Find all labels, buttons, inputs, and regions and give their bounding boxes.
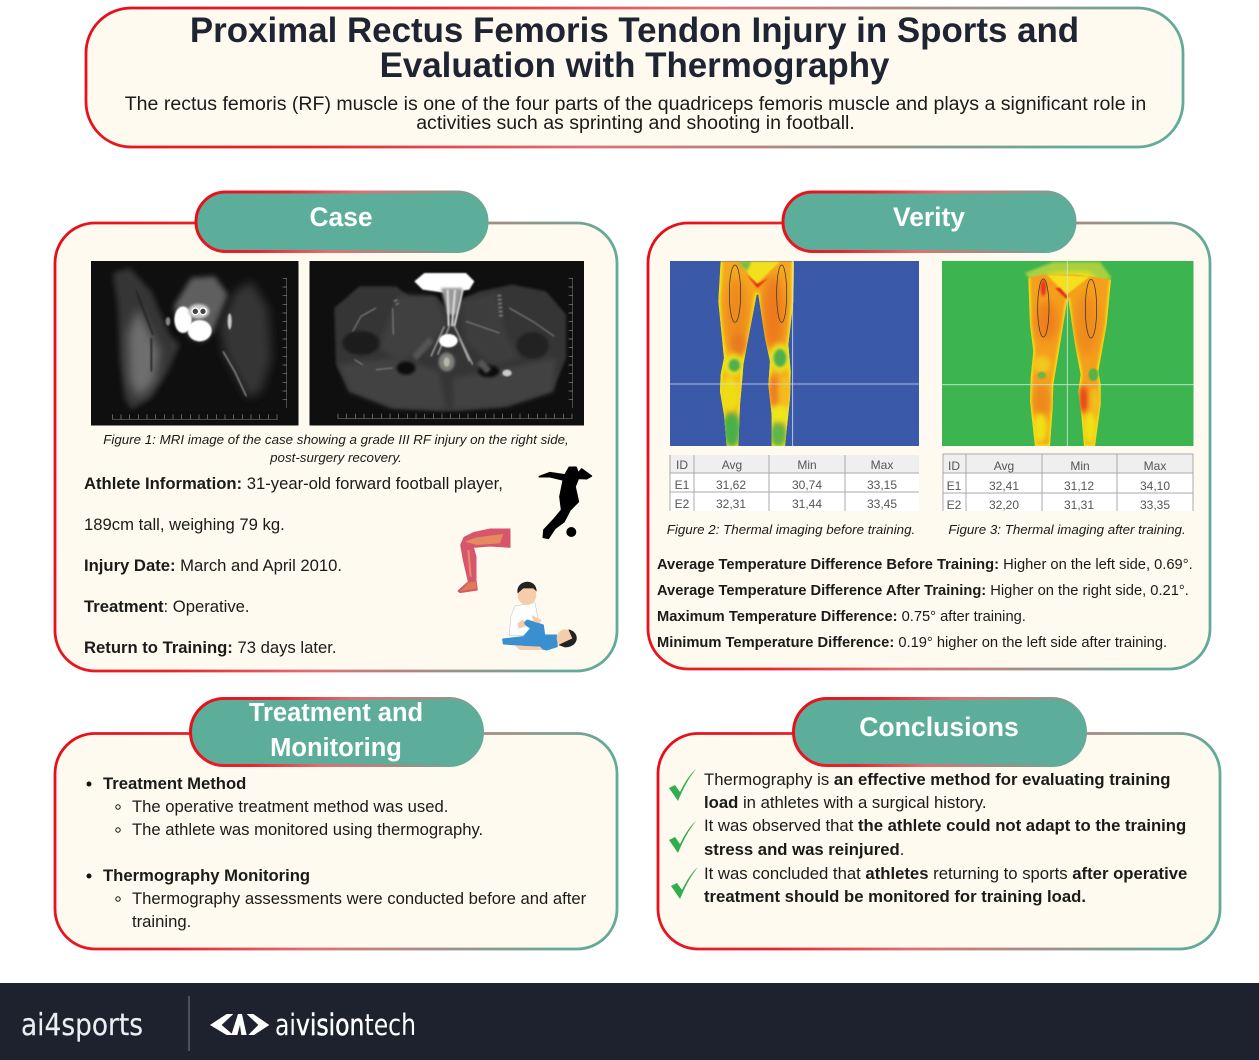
heading: treatment and monitoring: Monitoring — [270, 734, 402, 762]
thermal table: before training: 31,44 — [792, 497, 822, 511]
athlete details: Injury Date: March and April 2010. — [84, 556, 342, 575]
panel: conclusions — [658, 698, 1220, 949]
intro text — [125, 93, 1146, 134]
figure 1 caption: post-surgery recovery. — [269, 450, 402, 465]
conclusions text — [704, 770, 1187, 906]
temperature findings: Average Temperature Difference Before Training: Higher on the left side, 0.69°. — [657, 557, 1193, 573]
treatment list: Treatment Method — [103, 774, 246, 793]
temperature findings: Minimum Temperature Difference: 0.19° higher on the left side after training. — [657, 635, 1167, 651]
logo: aivisiontech — [210, 1008, 416, 1042]
icon: leg muscles — [458, 529, 510, 593]
treatment list: Thermography assessments were conducted before and after — [132, 889, 587, 908]
thermal table: before training: 30,74 — [792, 478, 822, 492]
temperature findings: Average Temperature Difference After Training: Higher on the right side, 0.21°. — [657, 583, 1189, 599]
footer bar — [0, 983, 1259, 1060]
thermal image: after training — [942, 261, 1194, 446]
athlete details — [84, 474, 503, 657]
icon: football player silhouette — [539, 467, 591, 538]
treatment list: training. — [132, 912, 191, 931]
conclusions text: stress and was reinjured. — [704, 840, 904, 859]
icon: check mark 3 — [671, 867, 698, 899]
heading: case: Case — [309, 202, 373, 232]
thermal table: before training: 33,45 — [867, 497, 897, 511]
thermal table: before training: ID — [676, 458, 688, 472]
thermal table: after training: E2 — [947, 498, 962, 512]
icon: therapist with patient — [503, 582, 577, 650]
thermal table: after training: ID — [948, 459, 960, 473]
athlete details: Athlete Information: 31-year-old forward football player, — [84, 474, 503, 493]
treatment list: The operative treatment method was used. — [132, 797, 448, 816]
treatment list — [86, 774, 587, 931]
MRI image: axial view — [310, 261, 584, 426]
icon: check mark 1 — [669, 769, 696, 801]
treatment list: Thermography Monitoring — [103, 866, 310, 885]
logo: aivisiontech: aivisiontech — [275, 1008, 416, 1042]
conclusions text: load in athletes with a surgical history. — [704, 793, 987, 812]
conclusions text: treatment should be monitored for training load. — [704, 887, 1086, 906]
title panel — [86, 8, 1183, 147]
treatment list: The athlete was monitored using thermography. — [132, 820, 483, 839]
thermal table: after training: 32,20 — [989, 498, 1019, 512]
conclusions text: Thermography is an effective method for evaluating training — [704, 770, 1170, 789]
thermal table: after training: 31,12 — [1064, 479, 1094, 493]
heading: verity: Verity — [893, 202, 965, 232]
heading: conclusions: Conclusions — [859, 712, 1019, 742]
logo: ai4sports: ai4sports — [21, 1008, 143, 1043]
thermal table: before training — [670, 455, 919, 511]
temperature findings — [657, 557, 1193, 651]
conclusions text: It was concluded that athletes returning to sports after operative — [704, 864, 1187, 883]
heading: conclusions — [794, 698, 1086, 766]
MRI image: coronal view — [91, 261, 298, 426]
thermal table: after training: E1 — [947, 479, 962, 493]
thermal table: before training: Max — [871, 458, 893, 472]
figure 3 caption: Figure 3: Thermal imaging after training. — [948, 522, 1186, 537]
athlete details: 189cm tall, weighing 79 kg. — [84, 515, 285, 534]
thermal table: before training: Avg — [722, 458, 742, 472]
thermal image: before training — [670, 261, 919, 447]
thermal table: after training: 34,10 — [1140, 479, 1170, 493]
intro text: activities such as sprinting and shooting in football. — [416, 112, 855, 134]
thermal table: before training: 32,31 — [716, 497, 746, 511]
thermal table: after training: Avg — [994, 459, 1014, 473]
athlete details: Return to Training: 73 days later. — [84, 638, 336, 657]
conclusions text: It was observed that the athlete could not adapt to the training — [704, 816, 1186, 835]
thermal table: before training: E2 — [675, 497, 690, 511]
thermal table: after training: Min — [1070, 459, 1090, 473]
panel: case — [55, 192, 617, 671]
figure 1 caption: Figure 1: MRI image of the case showing a grade III RF injury on the right side, — [103, 432, 569, 447]
thermal table: before training: 31,62 — [716, 478, 746, 492]
thermal table: after training: 32,41 — [989, 479, 1019, 493]
thermal table: before training: Min — [797, 458, 817, 472]
panel: verity — [648, 192, 1210, 669]
title: Evaluation with Thermography — [380, 46, 890, 85]
intro text: The rectus femoris (RF) muscle is one of the four parts of the quadriceps femoris muscle and plays a significant role in — [125, 93, 1146, 115]
thermal table: before training: 33,15 — [867, 478, 897, 492]
figure 1 caption — [103, 432, 569, 465]
heading: treatment and monitoring — [190, 698, 482, 766]
figure 2 caption: Figure 2: Thermal imaging before training. — [667, 522, 915, 537]
heading: treatment and monitoring: Treatment and — [249, 699, 423, 727]
thermal table: before training: E1 — [675, 478, 690, 492]
thermal table: after training — [943, 454, 1193, 512]
thermal table: after training: 31,31 — [1064, 498, 1094, 512]
athlete details: Treatment: Operative. — [84, 597, 250, 616]
thermal table: after training: Max — [1144, 459, 1166, 473]
title — [190, 11, 1079, 85]
icon: check mark 2 — [669, 821, 696, 853]
panel: treatment and monitoring — [55, 698, 617, 949]
title: Proximal Rectus Femoris Tendon Injury in Sports and — [190, 11, 1079, 50]
thermal table: after training: 33,35 — [1140, 498, 1170, 512]
heading: verity — [783, 192, 1075, 252]
temperature findings: Maximum Temperature Difference: 0.75° after training. — [657, 609, 1026, 625]
heading: case — [196, 192, 487, 252]
